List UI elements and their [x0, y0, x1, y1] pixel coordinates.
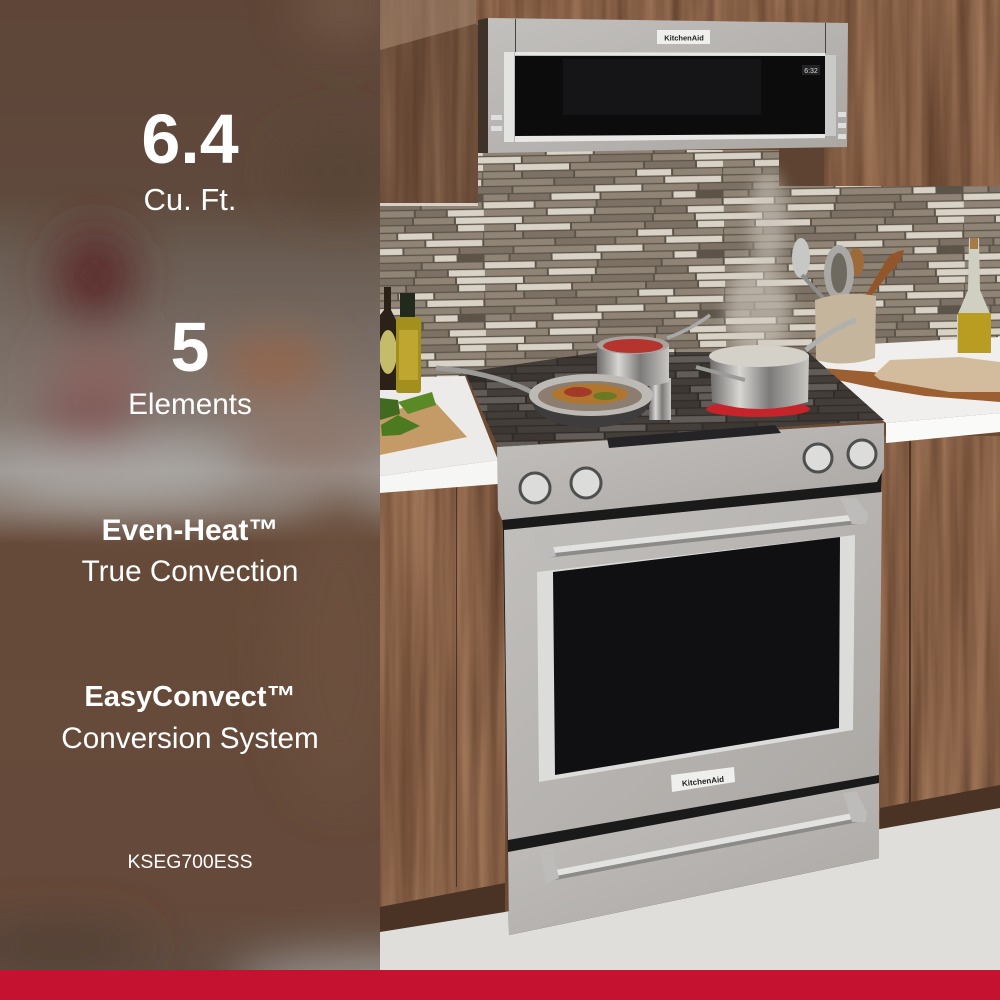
stat: 5 Elements [128, 308, 252, 421]
left blurred panel [0, 0, 380, 970]
cooktop glass [465, 352, 884, 447]
stat: 6.4 Cu. Ft.: 6.4 [141, 100, 239, 178]
bottles [379, 238, 991, 393]
range control panel [497, 423, 884, 520]
feature: Even-Heat True Convection: True Convection [82, 555, 298, 588]
feature: EasyConvect Conversion System: Conversion System [61, 722, 319, 755]
microwave: 6:32 [804, 68, 818, 75]
blurred colour blobs [1, 0, 380, 970]
oven door: KitchenAid [682, 775, 725, 788]
feature: Even-Heat True Convection: Even-Heat™ [102, 514, 278, 547]
feature: Even-Heat True Convection [82, 514, 298, 588]
model number: KSEG700ESS [127, 851, 253, 873]
warming drawer [508, 783, 879, 935]
microwave: KitchenAid [664, 34, 704, 42]
feature: EasyConvect Conversion System [61, 681, 319, 755]
stat: 5 Elements: Elements [128, 388, 252, 421]
feature: EasyConvect Conversion System: EasyConvect™ [84, 681, 296, 713]
oven door [504, 492, 882, 840]
stat: 6.4 Cu. Ft.: Cu. Ft. [143, 182, 236, 217]
red footer bar [0, 970, 1000, 1000]
backsplash [380, 150, 1000, 385]
floor [380, 808, 1000, 970]
lower cabinets [380, 436, 1000, 932]
pots and pan [436, 315, 856, 428]
upper cabinets [380, 0, 1000, 206]
cutting boards and food [380, 357, 1000, 455]
microwave [478, 18, 848, 153]
countertops [380, 337, 1000, 493]
utensil crock [792, 238, 904, 364]
steam [726, 170, 790, 356]
stat: 5 Elements: 5 [171, 308, 209, 386]
range body backing [497, 423, 884, 935]
stat: 6.4 Cu. Ft. [141, 100, 239, 217]
